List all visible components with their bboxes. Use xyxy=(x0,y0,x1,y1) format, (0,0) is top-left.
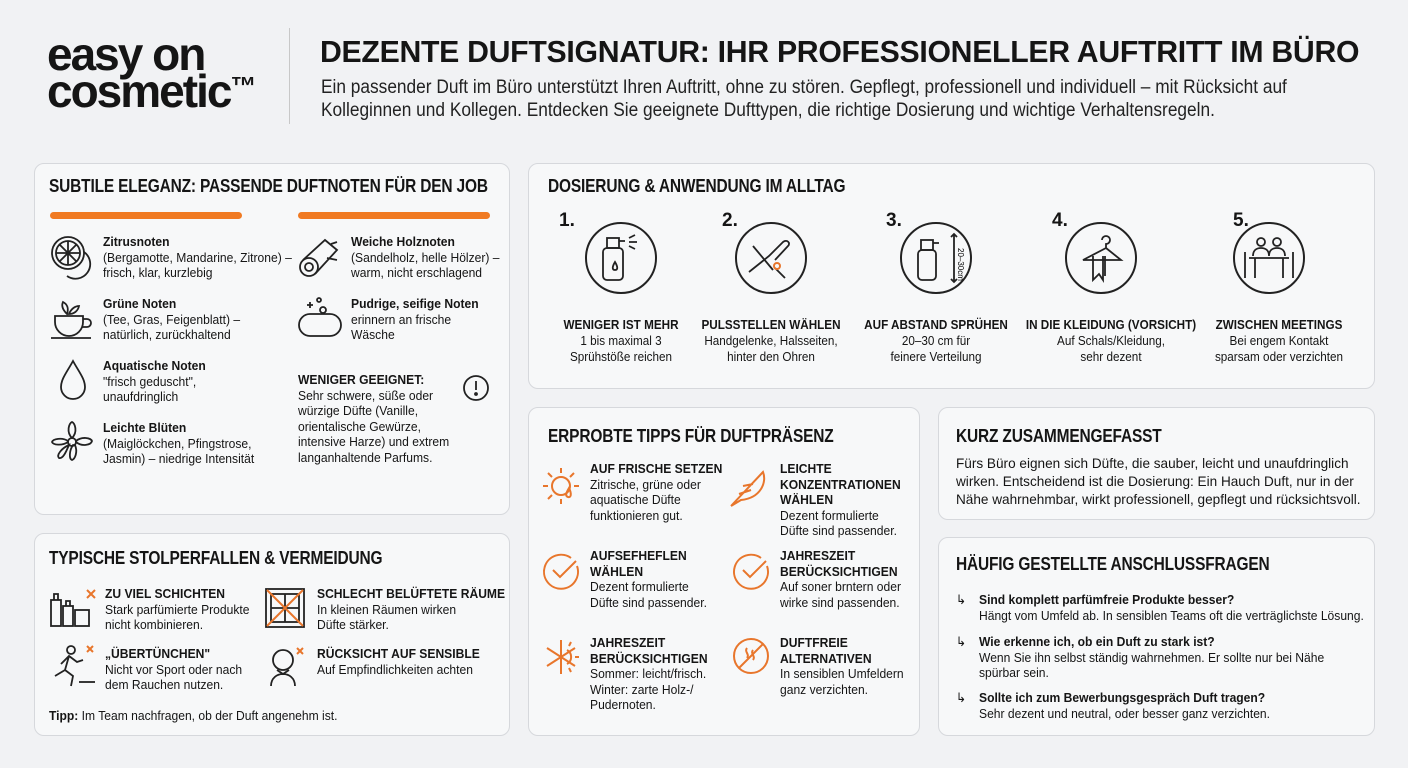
step 5: 5. xyxy=(1233,210,1249,231)
step 3: AUF ABSTAND SPRÜHEN xyxy=(864,317,1008,332)
panel: stolperfallen xyxy=(34,533,510,736)
icon: window xyxy=(265,588,305,628)
step 3: 20–30 cm für xyxy=(902,333,970,348)
panel: dosierung xyxy=(528,163,1375,389)
panel: duftnoten: Zitrusnoten xyxy=(103,234,169,249)
panel: tipps: WÄHLEN xyxy=(590,564,643,579)
panel: stolperfallen: RÜCKSICHT AUF SENSIBLE xyxy=(317,646,480,661)
panel: duftnoten: warm, nicht erschlagend xyxy=(351,265,482,280)
step 4: IN DIE KLEIDUNG (VORSICHT) xyxy=(1026,317,1196,332)
step 4: Auf Schals/Kleidung, xyxy=(1057,333,1165,348)
text: weniger geeignet: würzige Düfte (Vanille, xyxy=(298,403,418,418)
panel: tipps: Winter: zarte Holz-/ xyxy=(590,682,693,697)
panel: tipps: AUF FRISCHE SETZEN xyxy=(590,461,722,476)
logo: cosmetic™ xyxy=(47,65,254,117)
text: weniger geeignet: intensive Harze) und extrem xyxy=(298,434,449,449)
panel: kurz zusammengefasst: wirken. Entscheidend ist die Dosierung: Ein Hauch Duft, nur in der xyxy=(956,473,1354,489)
panel: faq: Sollte ich zum Bewerbungsgespräch Duft tragen? xyxy=(979,690,1265,705)
panel: stolperfallen: nicht kombinieren. xyxy=(105,617,203,632)
icon: soap xyxy=(298,297,342,337)
icon: flower xyxy=(51,421,93,461)
step 2: hinter den Ohren xyxy=(727,349,815,364)
panel: tipps: Sommer: leicht/frisch. xyxy=(590,666,706,681)
subtitle xyxy=(321,77,1287,121)
panel: tipps: WÄHLEN xyxy=(780,492,833,507)
text: weniger geeignet: langanhaltende Parfums. xyxy=(298,450,432,465)
panel: faq: Wie erkenne ich, ob ein Duft zu stark ist? xyxy=(979,634,1215,649)
step 5 xyxy=(1215,210,1343,364)
panel: faq: HÄUFIG GESTELLTE ANSCHLUSSFRAGEN xyxy=(956,554,1270,574)
panel: stolperfallen: In kleinen Räumen wirken xyxy=(317,602,456,617)
panel: tipps: DUFTFREIE xyxy=(780,635,848,650)
panel: faq xyxy=(938,537,1375,736)
icon: no scent xyxy=(733,638,769,674)
panel: duftnoten: erinnern an frische xyxy=(351,312,451,327)
panel: tipps: ALTERNATIVEN xyxy=(780,651,872,666)
panel: tipps: aquatische Düfte xyxy=(590,492,681,507)
step 2: 2. xyxy=(722,210,738,231)
panel: tipps: funktionieren gut. xyxy=(590,508,683,523)
panel: kurz zusammengefasst xyxy=(938,407,1375,520)
step 5: ZWISCHEN MEETINGS xyxy=(1216,317,1342,332)
panel: stolperfallen: ZU VIEL SCHICHTEN xyxy=(105,586,225,601)
panel: stolperfallen: SCHLECHT BELÜFTETE RÄUME xyxy=(317,586,505,601)
step 2 xyxy=(701,210,841,364)
panel: tipps: BERÜCKSICHTIGEN xyxy=(780,564,898,579)
panel: duftnoten: Pudrige, seifige Noten xyxy=(351,296,479,311)
panel: duftnoten: SUBTILE ELEGANZ: PASSENDE DUFTNOTEN FÜR DEN JOB xyxy=(49,176,488,196)
panel: duftnoten: natürlich, zurückhaltend xyxy=(103,327,231,342)
panel: duftnoten: (Maiglöckchen, Pfingstrose, xyxy=(103,436,252,451)
icon: sneeze xyxy=(270,647,304,686)
panel: faq: ↳ xyxy=(956,592,966,607)
panel: stolperfallen: Auf Empfindlichkeiten achten xyxy=(317,662,473,677)
panel: duftnoten: "frisch geduscht", xyxy=(103,374,196,389)
panel: duftnoten: unaufdringlich xyxy=(103,389,178,404)
panel: tipps: In sensiblen Umfeldern xyxy=(780,666,904,681)
text: weniger geeignet: WENIGER GEEIGNET: xyxy=(298,372,424,387)
panel: tipps: Dezent formulierte xyxy=(590,579,689,594)
panel: tipps: JAHRESZEIT xyxy=(590,635,665,650)
panel: duftnoten: Grüne Noten xyxy=(103,296,176,311)
step 3: 3. xyxy=(886,210,902,231)
icon: citrus xyxy=(51,236,92,280)
icon: check 2 xyxy=(733,554,769,590)
panel: duftnoten: Aquatische Noten xyxy=(103,358,206,373)
step 1: 1 bis maximal 3 xyxy=(580,333,662,348)
panel: tipps: BERÜCKSICHTIGEN xyxy=(590,651,708,666)
text: weniger geeignet: Sehr schwere, süße oder xyxy=(298,388,433,403)
panel: tipps: ganz verzichten. xyxy=(780,682,868,697)
text: weniger geeignet xyxy=(298,372,449,465)
step 2: PULSSTELLEN WÄHLEN xyxy=(701,317,841,332)
step 4: 4. xyxy=(1052,210,1068,231)
panel: duftnoten: Jasmin) – niedrige Intensität xyxy=(103,451,254,466)
panel: faq: ↳ xyxy=(956,690,966,705)
step 3: 20–30cm xyxy=(956,248,965,281)
panel: duftnoten: Leichte Blüten xyxy=(103,420,186,435)
icon: drop xyxy=(60,359,86,400)
icon: bottles xyxy=(50,589,96,627)
panel: faq: Hängt vom Umfeld ab. In sensiblen Teams oft die verträglichste Lösung. xyxy=(979,608,1364,623)
panel: kurz zusammengefasst: Nähe wahrnehmbar, wirkt professionell, gepflegt und rücksichtsvoll. xyxy=(956,491,1361,507)
panel: duftnoten: frisch, klar, kurzlebig xyxy=(103,265,213,280)
panel: stolperfallen: Düfte stärker. xyxy=(317,617,389,632)
panel: stolperfallen: „ÜBERTÜNCHEN" xyxy=(105,646,210,661)
panel: tipps: Düfte sind passender. xyxy=(780,523,897,538)
step 1: WENIGER IST MEHR xyxy=(563,317,679,332)
panel: faq: spürbar sein. xyxy=(979,665,1049,680)
panel: tipps: wirke sind passenden. xyxy=(780,595,900,610)
panel: tipps: Zitrische, grüne oder xyxy=(590,477,701,492)
step 5: sparsam oder verzichten xyxy=(1215,349,1343,364)
panel: duftnoten: Wäsche xyxy=(351,327,395,342)
panel: faq: Sind komplett parfümfreie Produkte besser? xyxy=(979,592,1234,607)
panel: tipps: Auf soner brntern oder xyxy=(780,579,901,594)
logo xyxy=(47,28,254,117)
text: weniger geeignet: orientalische Gewürze, xyxy=(298,419,421,434)
panel: stolperfallen: Stark parfümierte Produkte xyxy=(105,602,249,617)
step 3 xyxy=(864,210,1008,364)
panel: duftnoten: (Sandelholz, helle Hölzer) – xyxy=(351,250,500,265)
panel: tipps xyxy=(528,407,920,736)
step 4 xyxy=(1026,210,1196,364)
icon: check xyxy=(543,554,579,590)
step 4: sehr dezent xyxy=(1080,349,1142,364)
step 3: feinere Verteilung xyxy=(890,349,982,364)
panel: tipps: Pudernoten. xyxy=(590,697,656,712)
panel: tipps: Düfte sind passender. xyxy=(590,595,707,610)
step 1 xyxy=(559,210,679,364)
panel: kurz zusammengefasst: Fürs Büro eignen sich Düfte, die sauber, leicht und unaufdringlich xyxy=(956,455,1349,471)
panel: dosierung: DOSIERUNG & ANWENDUNG IM ALLTAG xyxy=(548,176,845,196)
panel: tipps: LEICHTE xyxy=(780,461,832,476)
icon: feather xyxy=(730,470,766,507)
panel: stolperfallen: TYPISCHE STOLPERFALLEN & VERMEIDUNG xyxy=(49,548,382,568)
text: tipp: Tipp: Im Team nachfragen, ob der Duft angenehm ist. xyxy=(49,708,338,723)
title: DEZENTE DUFTSIGNATUR: IHR PROFESSIONELLER AUFTRITT IM BÜRO xyxy=(320,34,1359,69)
logo: easy on xyxy=(47,28,204,80)
panel: duftnoten xyxy=(34,163,510,515)
panel: stolperfallen: Nicht vor Sport oder nach xyxy=(105,662,242,677)
icon: runner xyxy=(54,645,95,686)
panel: tipps: Dezent formulierte xyxy=(780,508,879,523)
icon: warning xyxy=(463,375,489,401)
step 1: 1. xyxy=(559,210,575,231)
subtitle: Kolleginnen und Kollegen. Entdecken Sie geeignete Dufttypen, die richtige Dosierung und wichtige Verhaltensregeln. xyxy=(321,100,1215,121)
panel: tipps: ERPROBTE TIPPS FÜR DUFTPRÄSENZ xyxy=(548,426,834,446)
step 2: Handgelenke, Halsseiten, xyxy=(704,333,838,348)
panel: tipps: KONZENTRATIONEN xyxy=(780,477,901,492)
step 1: Sprühstöße reichen xyxy=(570,349,672,364)
panel: tipps: AUFSEFHEFLEN xyxy=(590,548,687,563)
panel: stolperfallen: dem Rauchen nutzen. xyxy=(105,677,223,692)
panel: duftnoten: (Bergamotte, Mandarine, Zitrone) – xyxy=(103,250,292,265)
panel: duftnoten: (Tee, Gras, Feigenblatt) – xyxy=(103,312,240,327)
icon: sun drop xyxy=(543,468,579,504)
panel: duftnoten: Weiche Holznoten xyxy=(351,234,455,249)
icon: wood xyxy=(299,238,338,277)
panel: tipps: JAHRESZEIT xyxy=(780,548,855,563)
panel: kurz zusammengefasst: KURZ ZUSAMMENGEFASST xyxy=(956,426,1162,446)
subtitle: Ein passender Duft im Büro unterstützt Ihren Auftritt, ohne zu stören. Gepflegt, professionell und individuell – mit Rücksicht auf xyxy=(321,77,1287,98)
step 5: Bei engem Kontakt xyxy=(1230,333,1328,348)
icon: snow sun xyxy=(546,640,579,674)
panel: faq: ↳ xyxy=(956,634,966,649)
panel: faq: Sehr dezent und neutral, oder besser ganz verzichten. xyxy=(979,706,1270,721)
icon: tea xyxy=(51,300,92,339)
panel: faq: Wenn Sie ihn selbst ständig wahrnehmen. Er sollte nur bei Nähe xyxy=(979,650,1324,665)
